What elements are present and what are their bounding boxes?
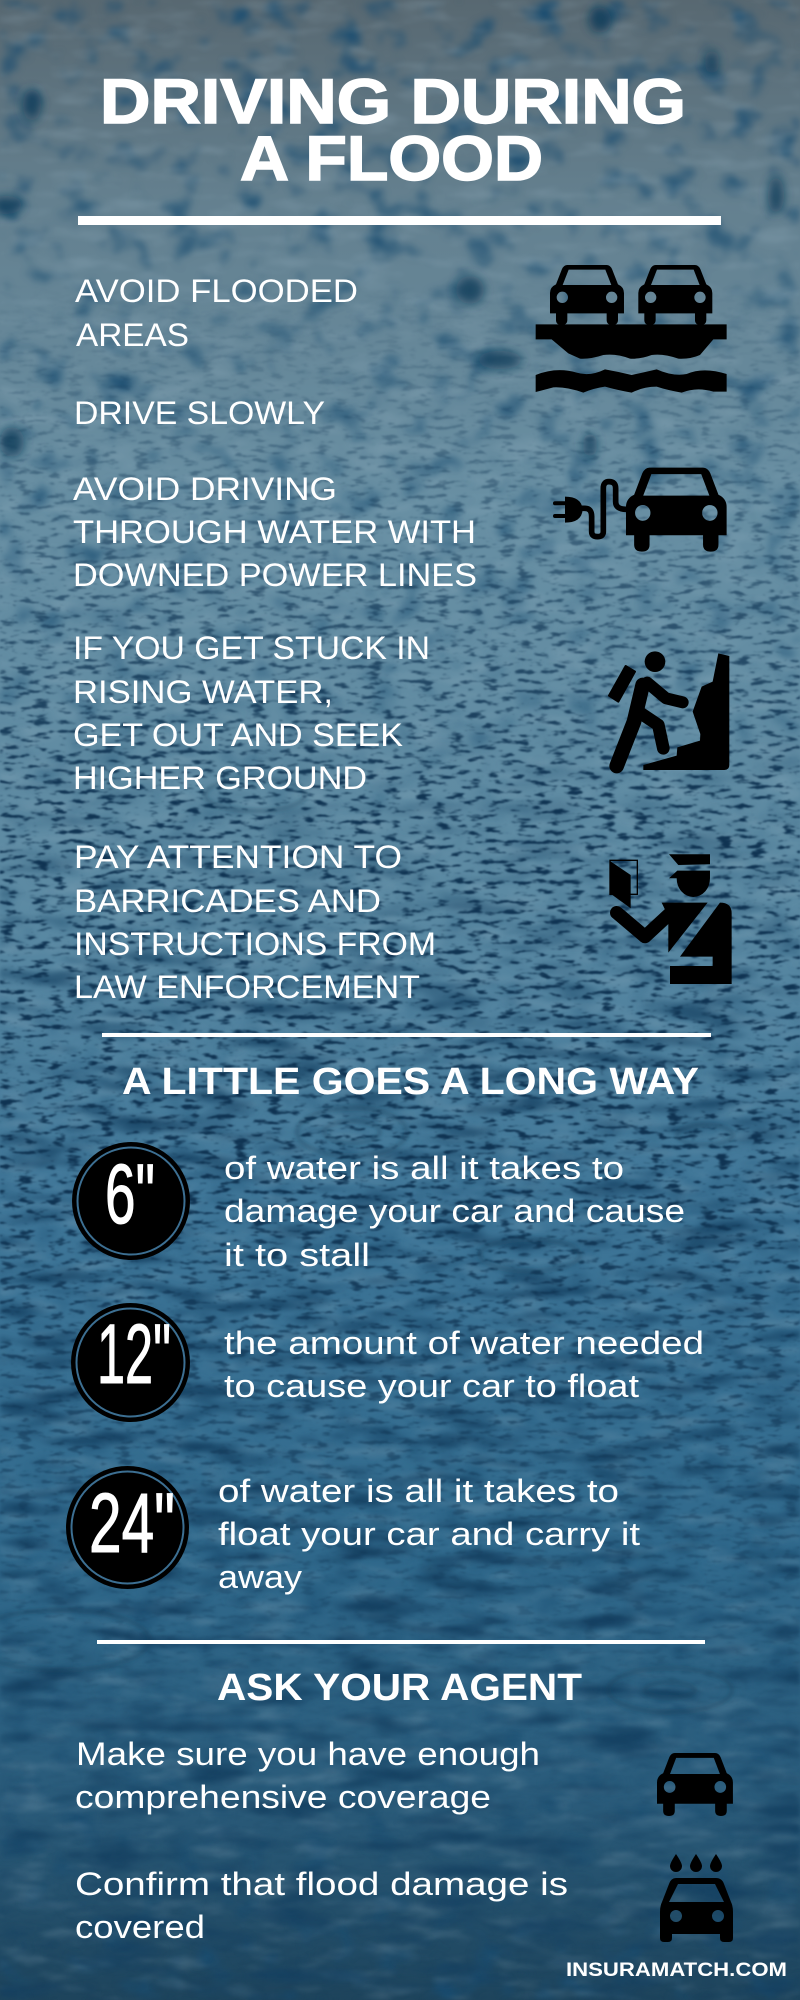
tip: avoid downed power lines <box>73 471 477 593</box>
tip: drive slowly: DRIVE SLOWLY <box>74 395 325 431</box>
title <box>100 67 686 194</box>
stat text: 6 inches: damage your car and cause <box>224 1193 685 1229</box>
tip: seek higher ground: RISING WATER, <box>73 674 333 710</box>
stat: 24 inches <box>66 1466 189 1589</box>
tip: barricades and law enforcement <box>74 839 436 1005</box>
stat text: 6 inches: it to stall <box>224 1237 370 1273</box>
agent tip: comprehensive coverage <box>75 1736 540 1815</box>
icon: hiker climbing <box>609 651 729 770</box>
tip: seek higher ground: HIGHER GROUND <box>73 760 367 796</box>
icon: car under raindrops <box>660 1854 733 1942</box>
agent tip: flood damage: covered <box>75 1909 205 1945</box>
icon: cars on ferry <box>536 265 727 393</box>
tip: avoid flooded areas <box>75 273 358 353</box>
title: DRIVING DURING <box>100 67 686 137</box>
agent tip: comprehensive coverage: comprehensive coverage <box>75 1779 491 1815</box>
stat text: 12 inches <box>224 1325 704 1404</box>
stat text: 24 inches: float your car and carry it <box>218 1516 640 1552</box>
stat: 6 inches: 6" <box>105 1147 155 1241</box>
tip: barricades and law enforcement: BARRICADES AND <box>74 883 381 919</box>
tip: seek higher ground: IF YOU GET STUCK IN <box>73 630 430 666</box>
tip: barricades and law enforcement: LAW ENFORCEMENT <box>74 969 420 1005</box>
stat: 6 inches <box>72 1142 190 1260</box>
tip: avoid downed power lines: THROUGH WATER WITH <box>73 514 476 550</box>
icon: police officer with notebook <box>610 854 732 984</box>
tip: barricades and law enforcement: PAY ATTENTION TO <box>74 839 402 875</box>
stat text: 24 inches <box>218 1473 640 1595</box>
section rule <box>97 1640 705 1644</box>
stat text: 6 inches: of water is all it takes to <box>224 1150 624 1186</box>
stat: 12 inches <box>71 1303 190 1422</box>
stat text: 12 inches: to cause your car to float <box>224 1368 639 1404</box>
tip: barricades and law enforcement: INSTRUCTIONS FROM <box>74 926 436 962</box>
tip: avoid downed power lines: DOWNED POWER LINES <box>73 557 477 593</box>
stat text: 24 inches: of water is all it takes to <box>218 1473 619 1509</box>
tip: avoid flooded areas: AVOID FLOODED <box>75 273 358 309</box>
section rule <box>102 1033 711 1037</box>
icon: plugged-in car <box>555 468 727 552</box>
stat text: 24 inches: away <box>218 1559 302 1595</box>
tip: seek higher ground <box>73 630 430 796</box>
agent tip: comprehensive coverage: Make sure you have enough <box>76 1736 540 1772</box>
stat text: 6 inches <box>224 1150 685 1273</box>
agent tip: flood damage: Confirm that flood damage is <box>75 1866 568 1902</box>
tip: seek higher ground: GET OUT AND SEEK <box>73 717 403 753</box>
heading: a little goes a long way: A LITTLE GOES A LONG WAY <box>122 1061 699 1103</box>
icon: car <box>657 1753 733 1816</box>
stat text: 12 inches: the amount of water needed <box>224 1325 704 1361</box>
stat: 12 inches: 12" <box>97 1307 171 1401</box>
footer: website credit: INSURAMATCH.COM <box>566 1960 787 1981</box>
heading: ask your agent: ASK YOUR AGENT <box>217 1667 582 1709</box>
agent tip: flood damage <box>75 1866 568 1945</box>
title: A FLOOD <box>240 124 543 194</box>
tip: avoid flooded areas: AREAS <box>76 317 189 353</box>
title rule <box>78 216 721 225</box>
stat: 24 inches: 24" <box>89 1476 175 1570</box>
tip: avoid downed power lines: AVOID DRIVING <box>73 471 337 507</box>
